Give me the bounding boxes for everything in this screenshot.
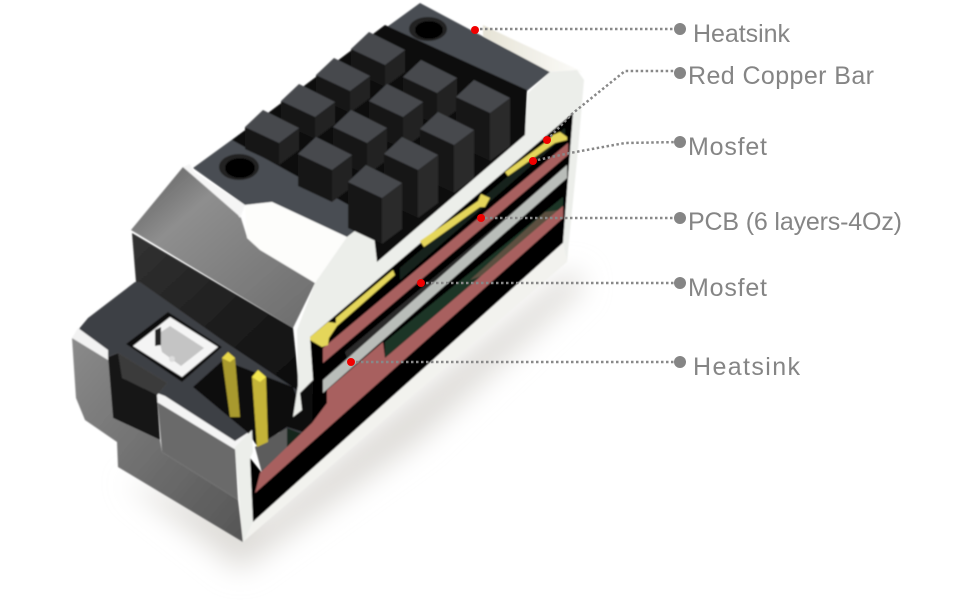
heatsink fins xyxy=(245,32,510,244)
label: Mosfet upper: Mosfet xyxy=(688,133,767,161)
leader line: red copper bar xyxy=(547,71,680,140)
pin housing xyxy=(255,428,287,473)
pin recess xyxy=(193,360,310,447)
white rim of lower block xyxy=(72,328,108,360)
gold pin tip 1 xyxy=(222,352,235,362)
silver heatsink bar xyxy=(323,165,567,393)
mounting hole front xyxy=(219,154,259,180)
label: Heatsink bottom: Heatsink xyxy=(693,353,800,381)
leader line: top heatsink xyxy=(475,28,680,30)
gold bar middle xyxy=(420,194,490,247)
leader line: lower mosfet xyxy=(421,282,680,284)
connector pin xyxy=(169,356,175,362)
white top facet xyxy=(245,202,347,283)
red marker dots xyxy=(347,26,551,366)
mosfet strip xyxy=(345,172,560,360)
gold bar right xyxy=(505,132,567,176)
leader line: upper mosfet xyxy=(533,142,680,161)
recess behind white wall xyxy=(287,380,327,435)
dark recessed body wall xyxy=(132,233,300,395)
notch in lower block xyxy=(108,353,167,440)
lower block left face xyxy=(72,338,243,542)
green PCB xyxy=(385,197,563,358)
lower copper bar xyxy=(255,206,563,493)
fin pit xyxy=(232,25,527,262)
lower block right face xyxy=(157,395,238,500)
gold bar left xyxy=(310,270,395,347)
label: PCB: PCB (6 layers-4Oz) xyxy=(688,208,902,236)
gold pin tip 2 xyxy=(252,370,266,382)
connector inner cavity xyxy=(146,326,204,366)
small green PCB patch xyxy=(287,428,308,456)
back white facet xyxy=(483,25,583,72)
leader line: PCB xyxy=(480,217,680,219)
upper chamfer gray face xyxy=(131,167,315,328)
white bottom wall xyxy=(243,243,567,542)
notch inner gray wall xyxy=(118,353,167,395)
gold header pin 2 xyxy=(252,370,268,447)
connector socket recess xyxy=(126,312,222,382)
white connector housing xyxy=(133,317,218,377)
mounting hole back xyxy=(409,17,447,41)
label: Red Copper Bar: Red Copper Bar xyxy=(688,62,874,90)
gold header pin 1 xyxy=(222,352,240,417)
white chamfer rim xyxy=(183,164,245,218)
leader line: bottom heatsink xyxy=(351,361,680,363)
white left strip of cut face xyxy=(235,430,255,542)
upper PCB strip xyxy=(400,128,565,280)
lower block top plate xyxy=(78,282,312,447)
top plate xyxy=(193,3,550,237)
white rim front xyxy=(157,393,252,450)
label: Heatsink top: Heatsink xyxy=(693,20,790,48)
component strip on PCB xyxy=(470,210,560,280)
label: Mosfet lower: Mosfet xyxy=(688,274,767,302)
floor shadow xyxy=(125,270,585,570)
upper copper bar xyxy=(323,143,568,363)
connector slot xyxy=(155,327,161,346)
gray end dots xyxy=(674,23,686,368)
cut section interior xyxy=(250,113,573,522)
white side wall upper xyxy=(293,70,584,417)
device: cut-away ESC body xyxy=(72,3,584,542)
